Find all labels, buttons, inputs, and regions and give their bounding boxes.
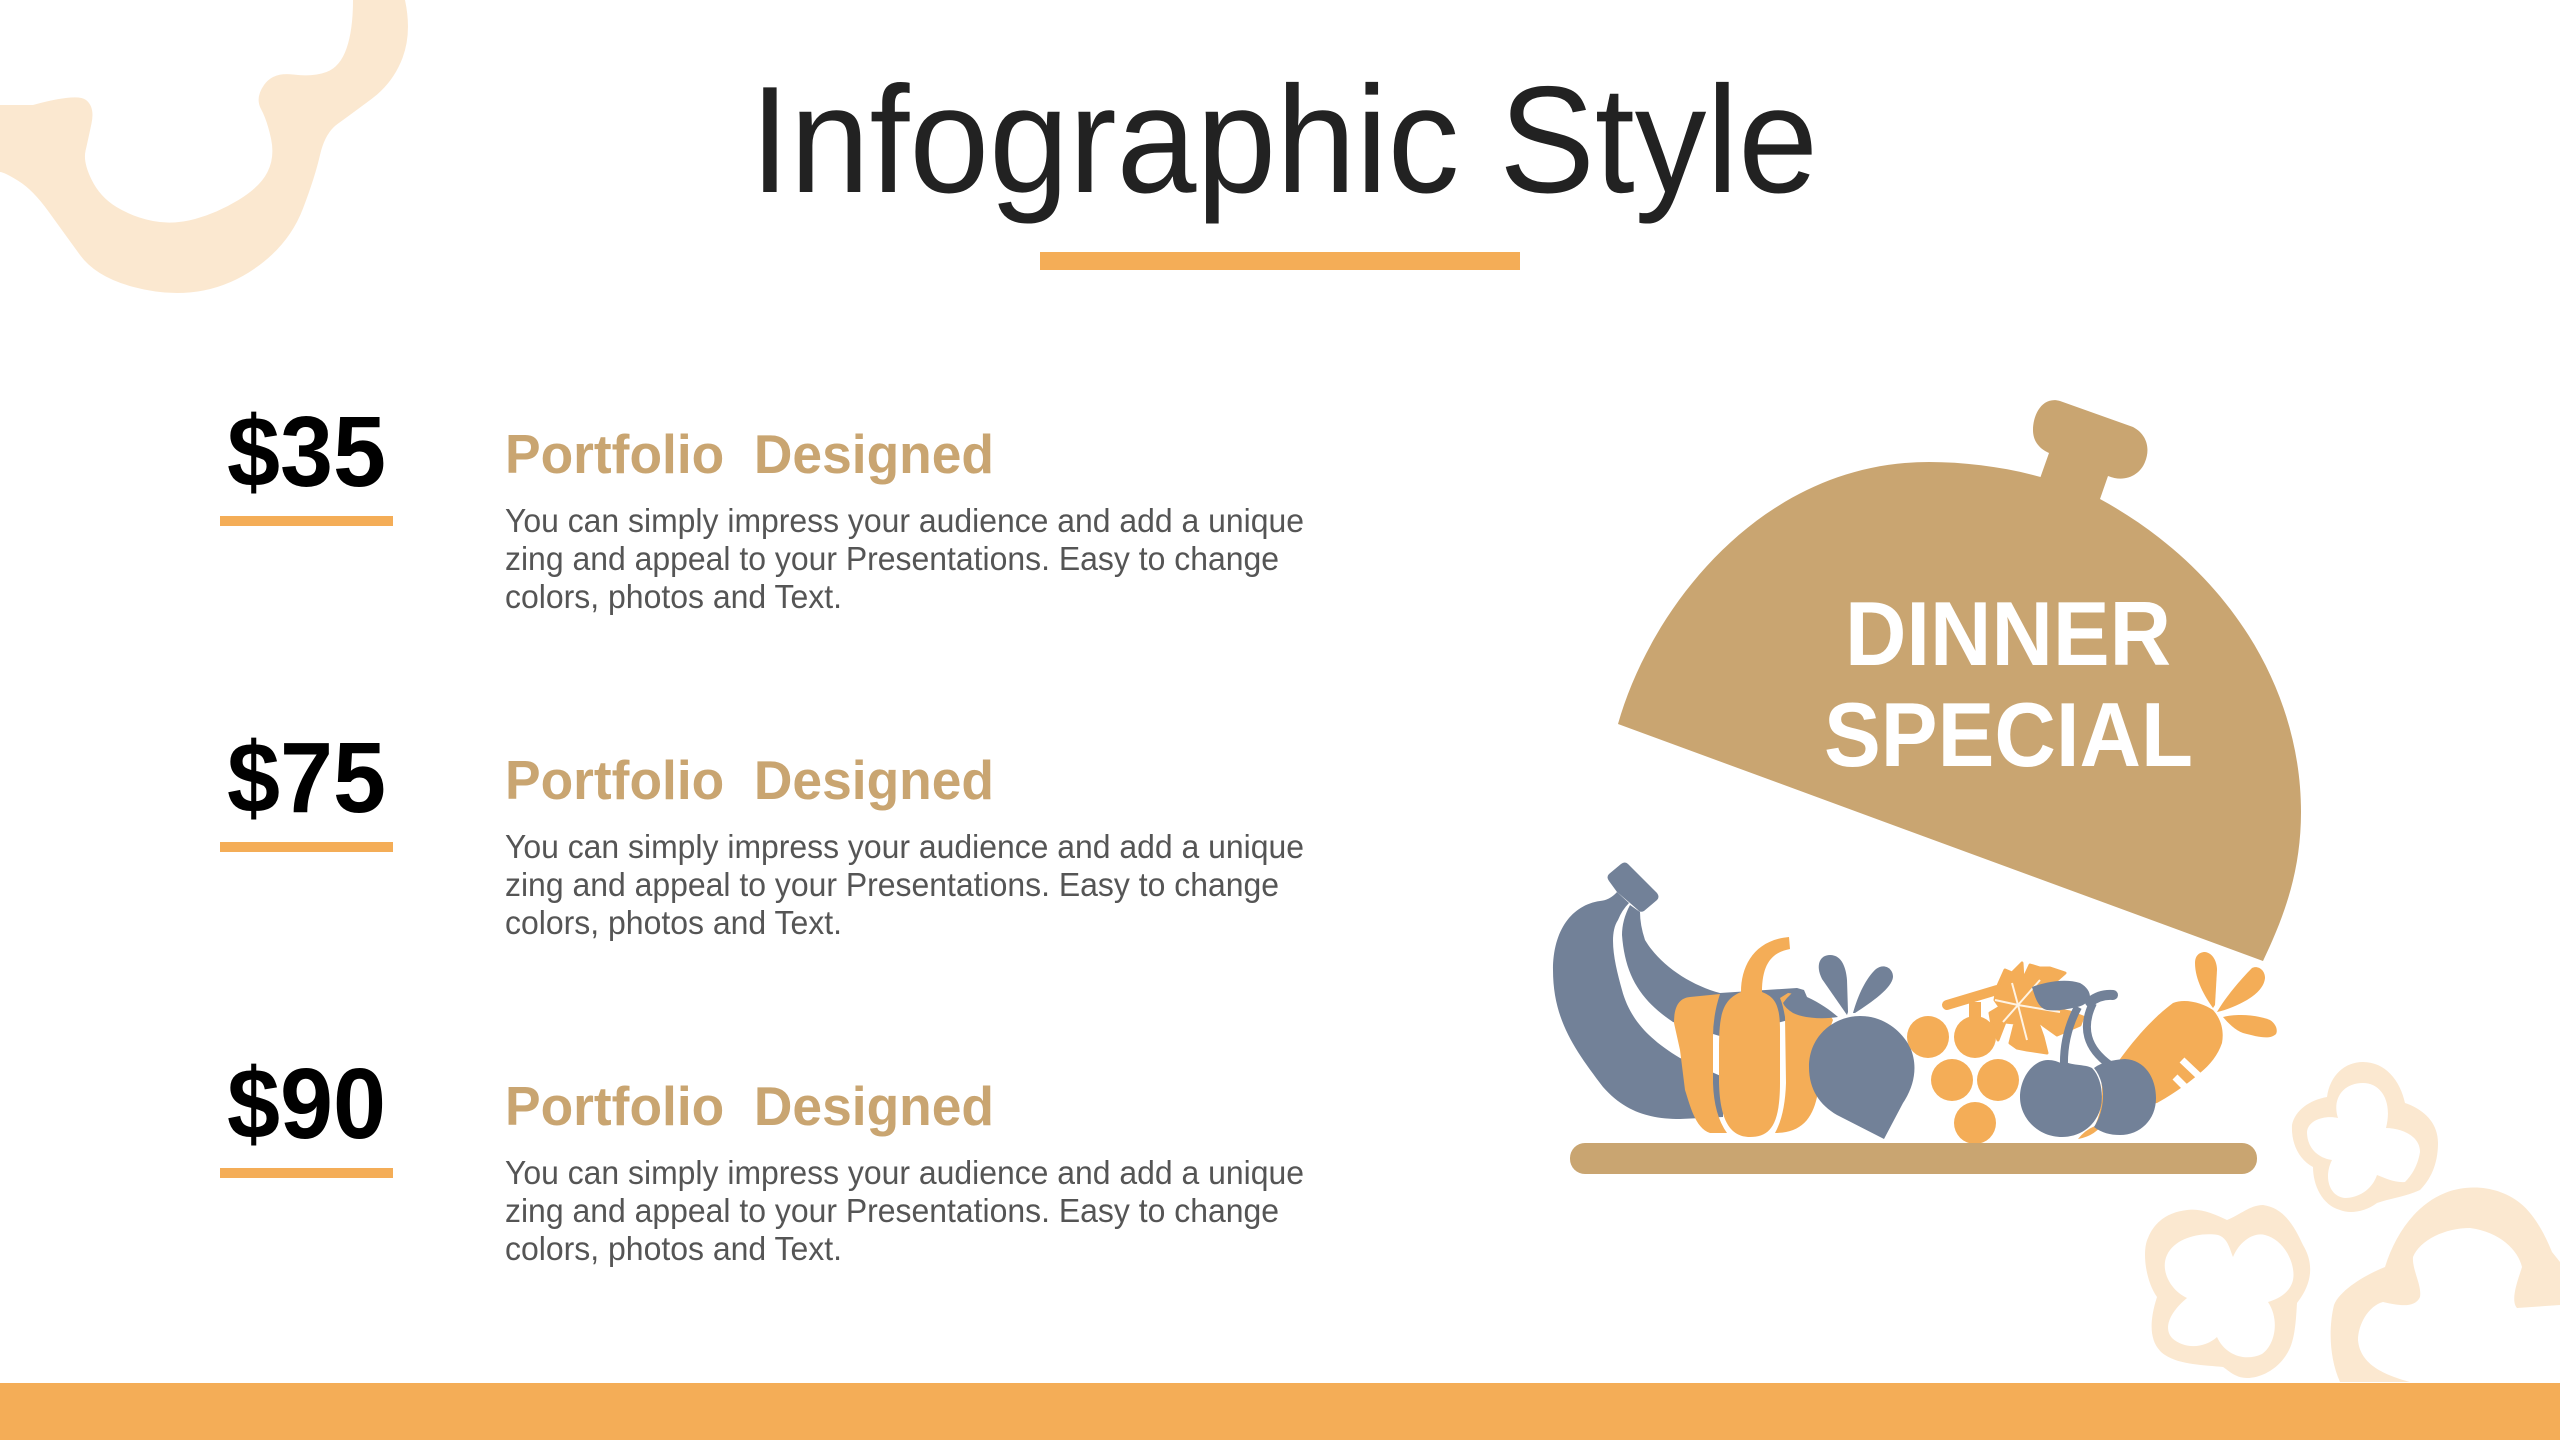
description: zing and appeal to your Presentations. Easy to change (505, 540, 1279, 577)
panel: price row 2 (220, 722, 1304, 941)
description: You can simply impress your audience and add a unique (505, 828, 1304, 865)
description: colors, photos and Text. (505, 1230, 842, 1267)
heading: Portfolio Designed (505, 749, 994, 811)
description: zing and appeal to your Presentations. Easy to change (505, 866, 1279, 903)
price underline (220, 516, 393, 526)
description (505, 1154, 1304, 1267)
panel: price row 3 (220, 1048, 1304, 1267)
heading: Portfolio Designed (505, 423, 994, 485)
icon: cloche with label: SPECIAL (1824, 685, 2193, 786)
description (505, 502, 1304, 615)
panel: price row 1 (220, 396, 1304, 615)
heading: Portfolio Designed (505, 1075, 994, 1137)
description: colors, photos and Text. (505, 904, 842, 941)
price underline (220, 1168, 393, 1178)
price underline (220, 842, 393, 852)
serving tray (1570, 1143, 2257, 1174)
icon: beetroot (1809, 955, 1914, 1139)
description: You can simply impress your audience and add a unique (505, 502, 1304, 539)
icon: bananas (1553, 862, 1800, 1119)
decorative pepper rings: bottom right (2145, 1062, 2560, 1382)
icon: grapes (1907, 963, 2083, 1144)
footer bar (0, 1383, 2560, 1440)
illustration: dinner special cloche and food (1553, 400, 2301, 1174)
decorative pepper ring: top left (0, 0, 408, 293)
description: colors, photos and Text. (505, 578, 842, 615)
icon: bell pepper (1674, 937, 1838, 1137)
description: You can simply impress your audience and add a unique (505, 1154, 1304, 1191)
icon: cloche with label: DINNER (1845, 584, 2171, 685)
price: $90 (227, 1048, 386, 1160)
title: Infographic Style (750, 55, 1818, 225)
price: $75 (227, 722, 386, 834)
icon: carrot (2118, 952, 2277, 1110)
price: $35 (227, 396, 386, 508)
title underline (1040, 252, 1520, 270)
description: zing and appeal to your Presentations. Easy to change (505, 1192, 1279, 1229)
icon: cloche with label (1618, 400, 2301, 961)
description (505, 828, 1304, 941)
icon: cherries (2020, 981, 2156, 1139)
